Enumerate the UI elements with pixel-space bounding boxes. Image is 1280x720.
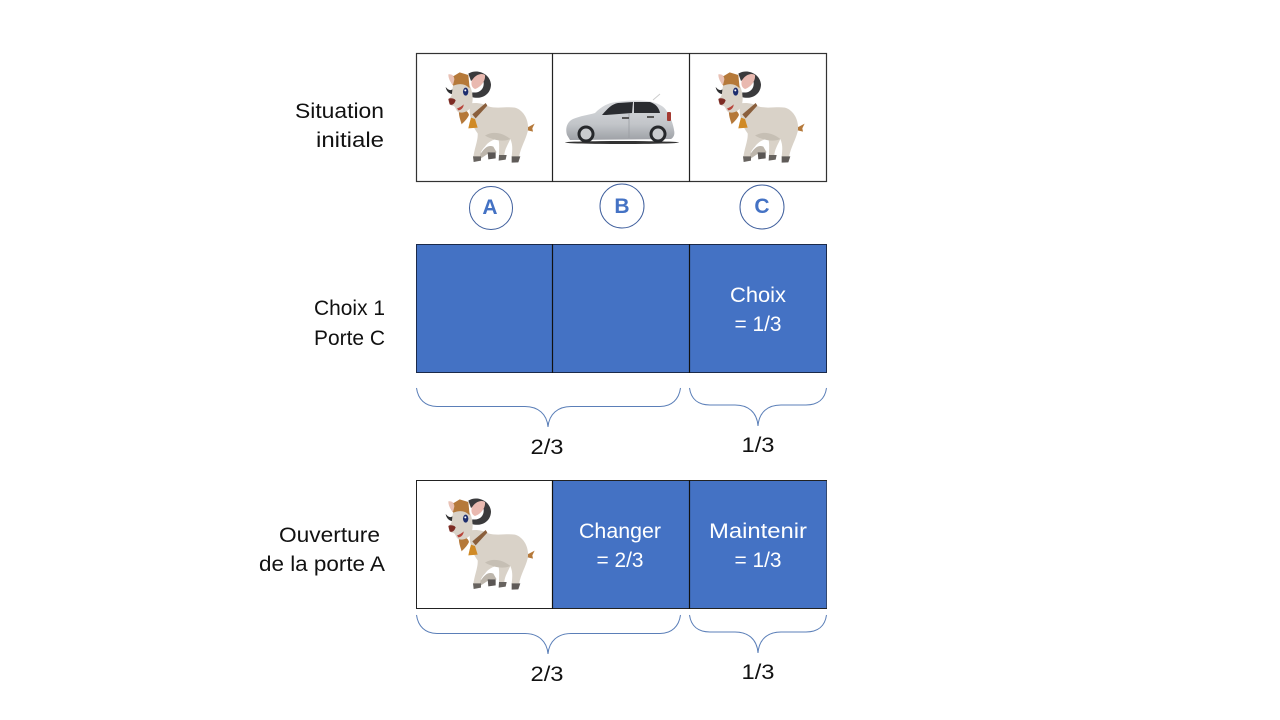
badge A	[470, 186, 512, 230]
label: Situation initiale: initiale	[316, 129, 384, 152]
brace 2/3 first	[416, 388, 680, 459]
badge A: A	[482, 196, 498, 219]
icon: car door B	[565, 94, 679, 144]
door C text	[709, 520, 807, 572]
brace 1/3 first	[690, 388, 826, 457]
label: Choix 1 Porte C: Choix 1	[314, 297, 385, 320]
door C text: Choix	[730, 284, 787, 307]
door C text	[730, 284, 787, 336]
door B text: Changer	[579, 520, 661, 543]
door C text: = 1/3	[734, 313, 782, 336]
row: choix 1 doors	[416, 244, 826, 373]
badge C	[740, 185, 784, 229]
brace 1/3 second	[690, 615, 826, 684]
row: situation initiale doors	[416, 53, 826, 182]
label: Situation initiale	[295, 100, 384, 152]
label: Ouverture de la porte A: de la porte A	[259, 553, 385, 576]
brace 1/3 first: 1/3	[742, 434, 774, 457]
badge C: C	[754, 195, 770, 218]
brace 1/3 second: 1/3	[742, 661, 774, 684]
badge B	[600, 184, 644, 228]
label: Choix 1 Porte C	[314, 297, 385, 350]
door C text: Maintenir	[709, 520, 807, 543]
row: ouverture doors	[416, 480, 826, 609]
icon: goat door C	[716, 72, 805, 163]
door C text: = 1/3	[734, 549, 782, 572]
label: Ouverture de la porte A: Ouverture	[279, 524, 380, 547]
icon: goat door A open	[446, 499, 535, 590]
label: Situation initiale: Situation	[295, 100, 384, 123]
label: Choix 1 Porte C: Porte C	[314, 327, 385, 350]
label: Ouverture de la porte A	[259, 524, 385, 576]
brace 2/3 second	[416, 615, 680, 686]
door B text	[579, 520, 661, 572]
door B text: = 2/3	[596, 549, 644, 572]
brace 2/3 second: 2/3	[530, 663, 564, 686]
icon: goat door A	[446, 72, 535, 163]
badge B: B	[614, 195, 630, 218]
brace 2/3 first: 2/3	[530, 436, 564, 459]
